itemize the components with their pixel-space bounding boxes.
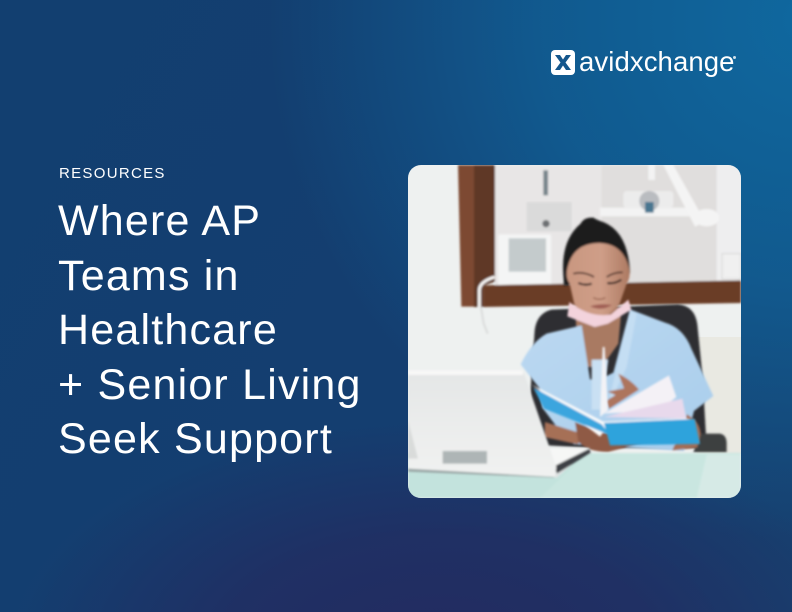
uniform xyxy=(521,309,713,451)
title: Teams in xyxy=(58,252,240,300)
person xyxy=(521,218,713,452)
hair xyxy=(563,218,630,286)
neck and chest xyxy=(575,307,622,367)
face xyxy=(567,243,630,320)
photo: nurse reading a book at a desk xyxy=(408,165,741,498)
title: + Senior Living xyxy=(58,360,362,408)
eyebrow label: RESOURCES xyxy=(59,165,166,182)
title: Healthcare xyxy=(58,306,278,354)
laptop xyxy=(408,370,591,478)
desk xyxy=(408,453,741,498)
title: Where AP xyxy=(58,197,261,245)
open book xyxy=(532,347,700,445)
arms and hands xyxy=(544,422,584,444)
title: Seek Support xyxy=(58,415,333,463)
wall xyxy=(408,165,741,498)
title xyxy=(58,197,362,463)
logo: avidxchange: avidxchange xyxy=(579,46,735,77)
mirror frame xyxy=(474,165,495,307)
mask xyxy=(567,300,631,327)
window to the back room xyxy=(458,165,741,334)
chair xyxy=(527,304,727,452)
